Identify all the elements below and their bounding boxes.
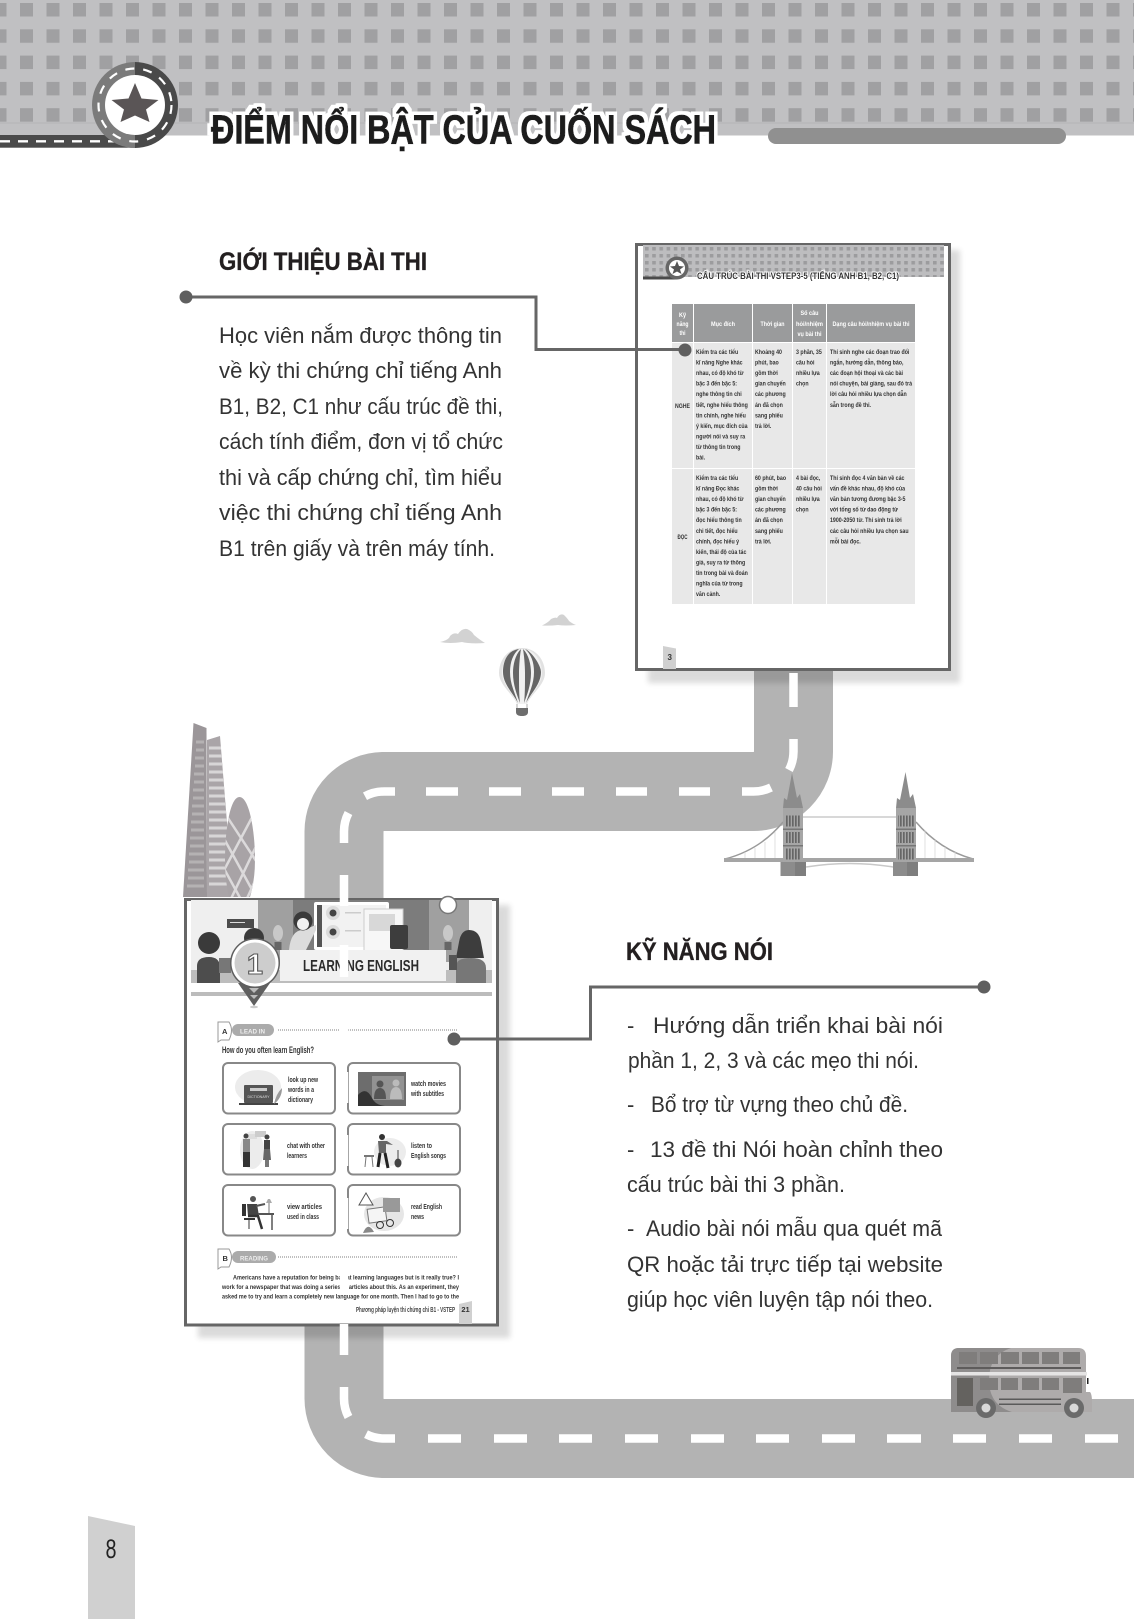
table row: reading: 40 câu hỏi: [796, 486, 822, 493]
card: view articles: used in class: [287, 1214, 319, 1221]
card: chat with other learners: [223, 1124, 335, 1174]
card: listen to English songs: [348, 1124, 460, 1174]
icon: tower bridge: [724, 772, 974, 876]
connector: exam introduction to page: [180, 290, 692, 356]
table header: năng: [676, 321, 689, 328]
table row: reading: các câu hỏi nhiều lựa chọn sau: [830, 529, 909, 535]
table row: listening: sẵn trong đề thi.: [830, 401, 871, 409]
card: read English news: news: [411, 1214, 424, 1221]
table row: reading: văn bản tương đương bậc 3-5: [830, 497, 906, 503]
lesson number pin: 1: [247, 949, 263, 981]
lesson banner rule: [191, 992, 492, 996]
table header: Kỹ: [679, 312, 686, 319]
card: view articles: [223, 1185, 335, 1236]
table row: listening: tin chính, nghe hiểu: [696, 412, 746, 420]
table row: reading: kĩ năng Đọc khác: [696, 486, 740, 493]
text block: speaking skill: phần 1, 2, 3 và các mẹo thi nói.: [628, 1048, 919, 1073]
table row: listening: tiết, nghe hiểu thông: [696, 401, 748, 409]
table header: thi: [680, 330, 686, 337]
header band: [0, 0, 1134, 136]
table row: listening: trả lời.: [755, 424, 772, 430]
section tab: reading: B: [222, 1254, 228, 1263]
heading: speaking skill: KỸ NĂNG NÓI: [626, 936, 773, 966]
table header: Dạng câu hỏi/nhiệm vụ bài thi: [832, 321, 910, 328]
table row: reading: án đã chọn: [755, 518, 783, 524]
table header: vụ bài thi: [798, 331, 822, 338]
card: watch movies: [348, 1063, 460, 1114]
table header: [672, 304, 915, 342]
text block: speaking skill: -: [627, 1013, 634, 1038]
table row: listening: các đoạn hội thoại và các bài: [830, 371, 903, 377]
table row: listening: từ thông tin trong: [696, 445, 741, 451]
table row: reading: gồm thời: [755, 486, 778, 493]
header pill: [768, 128, 1066, 144]
page footer: Phương pháp luyện thi chứng chỉ B1 - VSTEP: [356, 1307, 455, 1314]
table header: Số câu: [800, 309, 819, 317]
road: [344, 660, 1134, 1438]
reading passage: work for a newspaper that was doing a series of articles about this. As an experiment, they: [221, 1284, 459, 1291]
text block: exam introduction: về kỳ thi chứng chỉ tiếng Anh: [219, 358, 502, 383]
card: watch movies: watch movies: [410, 1081, 446, 1088]
text block: speaking skill: giúp học viên luyện tập nói theo.: [627, 1287, 933, 1312]
section tab: reading: [218, 1249, 457, 1269]
page footer: 21: [461, 1305, 470, 1314]
header road strip: [0, 135, 136, 148]
table row: listening: nghe thông tin chi: [696, 392, 742, 398]
table row: reading: nghĩa của từ trong: [696, 581, 743, 588]
table row: listening: bậc 3 đến bậc 5:: [696, 380, 737, 388]
table row: listening: sang phiếu: [755, 412, 783, 420]
section tab: lead in: A: [222, 1027, 228, 1036]
icon: city skyscrapers: [183, 723, 255, 897]
text block: exam introduction: B1, B2, C1 như cấu trúc đề thi,: [219, 394, 503, 419]
table row: reading: tin trong bài và đoán: [696, 571, 748, 577]
table row: listening: án đã chọn: [755, 403, 783, 409]
table row: listening: nhau, có độ khó từ: [696, 371, 744, 377]
reading passage: [221, 1274, 459, 1300]
table row: listening: 3 phần, 35: [796, 350, 822, 356]
table row: reading: [672, 469, 915, 604]
text block: exam introduction: thi và cấp chứng chỉ, tìm hiểu: [219, 465, 502, 490]
page header band: [643, 245, 944, 280]
table row: listening: bài.: [696, 455, 705, 462]
title: ĐIỂM NỔI BẬT CỦA CUỐN SÁCH: [211, 106, 716, 152]
text block: speaking skill: QR hoặc tải trực tiếp tại website: [627, 1252, 943, 1277]
page number tab: 8: [106, 1534, 116, 1564]
right tower: [893, 772, 918, 876]
section tab: reading: READING: [240, 1256, 268, 1262]
text block: exam introduction: việc thi chứng chỉ tiếng Anh: [219, 500, 502, 525]
table row: reading: Thí sinh đọc 4 văn bản về các: [830, 476, 905, 482]
table row: reading: Kiểm tra các tiểu: [696, 474, 739, 482]
text block: speaking skill: Bổ trợ từ vựng theo chủ đề.: [651, 1092, 908, 1117]
question: How do you often learn English?: [222, 1045, 314, 1055]
text block: speaking skill: 13 đề thi Nói hoàn chỉnh theo: [650, 1137, 943, 1162]
section tab: lead in: LEAD IN: [240, 1028, 265, 1036]
icon: star badge: [92, 62, 178, 148]
table row: reading: kiến, thái độ của tác: [696, 548, 747, 556]
table row: listening: chọn: [796, 381, 809, 388]
page number tab: 3: [668, 653, 672, 662]
table row: reading: đọc hiểu thông tin: [696, 516, 742, 524]
table row: listening: [672, 343, 915, 468]
table row: listening: lời câu hỏi nhiều lựa chọn dẫn: [830, 390, 907, 398]
table row: listening: các phương: [755, 392, 786, 398]
table row: reading: gian chuyển: [755, 495, 786, 503]
table row: reading: 60 phút, bao: [755, 476, 786, 482]
card: look up new words: look up new: [288, 1077, 318, 1084]
icon: clouds: [440, 614, 576, 643]
text block: exam introduction: Học viên nắm được thông tin: [219, 323, 502, 348]
lesson banner illustration: [191, 896, 492, 983]
page number tab: [663, 646, 676, 669]
text block: speaking skill: cấu trúc bài thi 3 phần.: [627, 1172, 845, 1197]
text block: speaking skill: -: [627, 1137, 634, 1162]
page number tab: [88, 1516, 135, 1619]
connector: speaking skill to page: [448, 980, 990, 1046]
table row: listening: gian chuyển: [755, 380, 786, 388]
table row: reading: nhau, có độ khó từ: [696, 497, 744, 503]
table row: reading: nhiều lựa: [796, 497, 820, 503]
table row: reading: chính, đọc hiểu ý: [696, 538, 740, 546]
card: watch movies: with subtitles: [410, 1091, 444, 1098]
lesson number pin: [230, 938, 280, 1008]
table row: reading: văn cảnh.: [696, 592, 721, 598]
table row: reading: trả lời.: [755, 539, 772, 546]
table row: reading: các phương: [755, 507, 786, 514]
table row: listening: câu hỏi: [796, 360, 815, 367]
table row: listening: ngắn, hướng dẫn, thông báo,: [830, 359, 904, 367]
page footer: [356, 1301, 472, 1324]
table row: listening: nói chuyện, bài giảng, sau đó trả: [830, 381, 913, 388]
card: read English news: read English: [411, 1204, 442, 1211]
text block: exam introduction: cách tính điểm, đơn vị tổ chức: [219, 429, 503, 454]
road centre dashes: [344, 673, 1118, 1438]
panel: exam structure page: [636, 244, 960, 683]
text block: speaking skill: -: [627, 1216, 634, 1241]
card: look up new words: dictionary: [288, 1097, 313, 1104]
left tower: [780, 773, 806, 876]
table row: reading: chi tiết, đọc hiểu: [696, 527, 738, 535]
text block: speaking skill: -: [627, 1092, 634, 1117]
lesson title: LEARNING ENGLISH: [303, 958, 419, 975]
text block: exam introduction: B1 trên giấy và trên máy tính.: [219, 536, 495, 561]
table row: listening: phút, bao: [755, 360, 779, 367]
table row: listening: Khoảng 40: [755, 350, 783, 356]
table row: reading: giả, suy ra từ thông: [696, 560, 746, 567]
table row: reading: 4 bài đọc,: [796, 476, 821, 482]
table row: listening: người nói và suy ra: [696, 434, 746, 441]
table row: reading: sang phiếu: [755, 527, 783, 535]
table row: reading: 1900-2050 từ. Thí sinh trả lời: [830, 518, 902, 524]
icon: hot air balloon: [499, 648, 545, 716]
icon: double decker bus: [951, 1348, 1092, 1418]
text block: speaking skill: [627, 1013, 943, 1312]
panel: speaking lesson page: [186, 896, 510, 1338]
reading passage: asked me to try and learn a completely new language for one month. Then I had to go to the: [222, 1294, 459, 1300]
text block: exam introduction: [219, 323, 503, 561]
table row: reading: ĐỌC: [678, 534, 688, 541]
table row: reading: chọn: [796, 507, 809, 514]
table: [672, 304, 915, 604]
card: look up new words: [223, 1063, 335, 1114]
reading passage: Americans have a reputation for being bad at learning languages but is it really true? I: [233, 1274, 459, 1282]
card: look up new words: words in a: [287, 1087, 314, 1094]
card: chat with other learners: chat with other: [287, 1143, 325, 1150]
table row: listening: Kiểm tra các tiểu: [696, 348, 739, 356]
table header: Thời gian: [760, 321, 785, 328]
card: listen to English songs: listen to: [411, 1143, 432, 1150]
table row: listening: Thí sinh nghe các đoạn trao đổi: [830, 348, 910, 356]
card: view articles: view articles: [287, 1204, 322, 1211]
table row: listening: nhiều lựa: [796, 371, 820, 377]
text block: speaking skill: Audio bài nói mẫu qua quét mã: [646, 1216, 943, 1241]
section tab: lead in: [218, 1022, 457, 1042]
table header: hỏi/nhiệm: [796, 321, 823, 328]
table row: listening: NGHE: [675, 403, 691, 410]
card: chat with other learners: learners: [287, 1153, 307, 1160]
text block: speaking skill: Hướng dẫn triển khai bài nói: [653, 1013, 943, 1038]
table row: listening: ý kiến, mục đích của: [696, 422, 748, 430]
table row: reading: vấn đề khác nhau, độ khó của: [830, 485, 906, 493]
table header: Mục đích: [711, 321, 735, 328]
heading: exam introduction: GIỚI THIỆU BÀI THI: [219, 246, 427, 276]
card: read English news: [348, 1185, 460, 1236]
table row: listening: kĩ năng Nghe khác: [696, 360, 743, 367]
card: look up new words: DICTIONARY: [247, 1095, 270, 1099]
table row: reading: với tổng số từ dao động từ: [830, 506, 899, 514]
page title: CẤU TRÚC BÀI THI VSTEP3-5 (TIẾNG ANH B1, B2, C1): [697, 270, 899, 282]
table row: listening: gồm thời: [755, 371, 778, 377]
card: listen to English songs: English songs: [411, 1153, 446, 1160]
table row: reading: bậc 3 đến bậc 5:: [696, 506, 737, 514]
table row: reading: mỗi bài đọc.: [830, 538, 861, 546]
